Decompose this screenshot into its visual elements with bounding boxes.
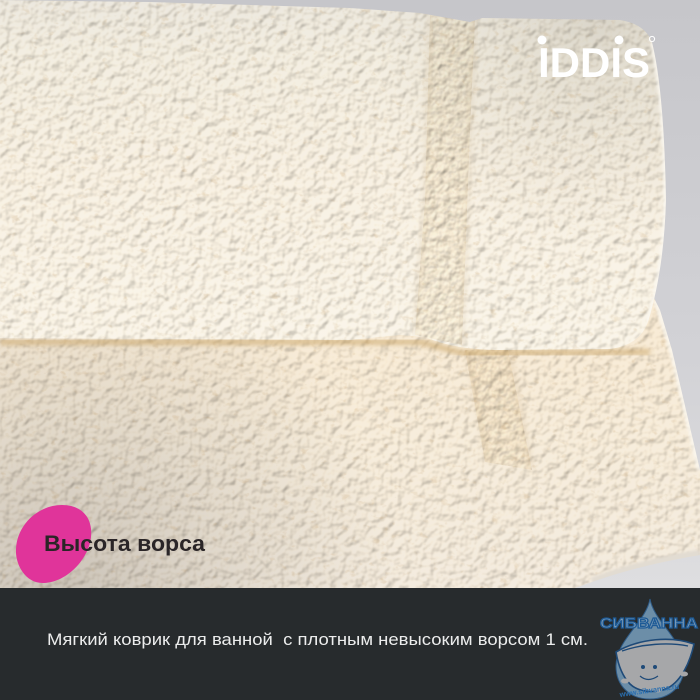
pink blob behind heading	[16, 505, 91, 583]
watermark logo: Сибванна	[600, 599, 698, 699]
rolled bath mat	[0, 0, 700, 352]
caption text: Мягкий коврик для ванной с плотным невысоким ворсом 1 см.	[47, 631, 588, 649]
logo url: www.sibvanna.ru	[618, 682, 680, 699]
logo wordmark: СИБВАННА	[600, 615, 698, 632]
heading: Высота ворса	[44, 531, 206, 556]
dark caption band	[0, 588, 700, 700]
icon: water drop	[616, 599, 684, 699]
iddis brand logo: IDDIS	[538, 39, 650, 86]
icon: bathtub with face	[616, 639, 694, 692]
lower bath mat	[0, 290, 700, 590]
